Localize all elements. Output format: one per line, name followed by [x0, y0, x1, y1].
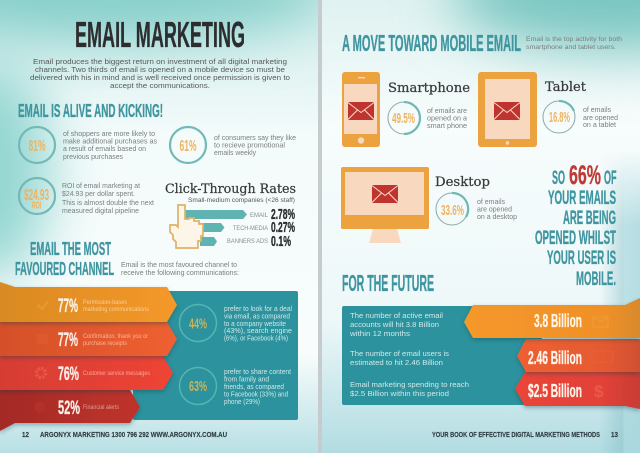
ribbon: 3.8 billion [464, 298, 640, 338]
text: smartphone [427, 106, 467, 130]
callout: so 66% of your emails [535, 160, 617, 290]
ribbon: 76% customer service: Customer service messages [83, 370, 151, 377]
stat: 81%: a result of emails based on [63, 144, 146, 153]
bar labels: EMAIL [250, 212, 269, 219]
ribbon: 2.46 billion: 2.46 Billion [528, 348, 582, 368]
heading: email the most favoured channel [15, 238, 114, 279]
label: desktop: Desktop [435, 175, 490, 190]
bar values [271, 207, 295, 250]
text: 44% description [224, 304, 292, 342]
text: 44% description: prefer to look for a deal [224, 304, 292, 313]
text: marketing spending: $2.5 Billion within this period [350, 389, 449, 398]
title: EMAIL MARKETING [75, 14, 245, 55]
heading: email the most favoured channel: EMAIL THE MOST [30, 238, 111, 259]
ribbon: 2.46 billion [517, 339, 640, 372]
text: marketing spending [350, 380, 469, 398]
ribbon: 76% customer service [0, 356, 173, 390]
ribbon: 52% financial alerts: Financial alerts [83, 404, 120, 411]
text: desktop: of emails [477, 197, 505, 206]
text: 63% description: friends, as compared [224, 382, 284, 391]
icon: dollar: $ [594, 382, 604, 401]
stat: 81% [19, 127, 157, 163]
icon: faint square [37, 334, 48, 344]
icon: faint hexagon [35, 401, 45, 413]
bar labels [227, 212, 269, 245]
text: OF [604, 167, 617, 189]
ribbon: 77% permission: Permission-bases [83, 299, 128, 306]
stat: ROI: $24.93 [24, 187, 49, 204]
label: tablet: Tablet [545, 80, 587, 95]
label: smartphone: Smartphone [388, 81, 470, 96]
ribbon: $2.5 billion: $2.5 Billion [528, 381, 582, 401]
background: left page [0, 0, 330, 453]
bar labels: TECH-MEDIA [233, 225, 269, 232]
bar values: 2.78% [271, 207, 295, 223]
text: active email accounts: accounts will hit 3.8 Billion [350, 320, 439, 329]
intro text: channels. Two thirds of email is opened on a mobile device so must be [35, 65, 285, 74]
ribbon: 3.8 billion: 3.8 Billion [534, 311, 582, 331]
ribbon: $2.5 billion [515, 372, 640, 409]
text: email users: estimated to hit 2.46 Billion [350, 358, 443, 367]
stat: ROI: ROI of email marketing at [62, 181, 140, 190]
chart title: Click-Through Rates [165, 182, 296, 197]
ribbon: 77% permission: 77% [58, 296, 78, 317]
heading: email is alive and kicking: EMAIL IS ALIVE AND KICKING! [18, 100, 163, 121]
ribbon: 77% permission: marketing communications [83, 306, 150, 313]
icon: faint envelopes [591, 351, 613, 362]
text: email users [350, 349, 449, 367]
text: tablet: on a tablet [583, 120, 616, 129]
mobile intro text: Email is the top activity for both [526, 36, 622, 43]
mobile intro text [526, 36, 622, 51]
text: smartphone: smart phone [427, 121, 467, 130]
heading: email the most favoured channel: FAVOURED CHANNEL [15, 258, 114, 279]
icon: desktop [341, 167, 429, 243]
mobile intro text: smartphone and tablet users. [526, 44, 616, 51]
click-through rates chart [165, 182, 296, 250]
footer: right page: 13 [611, 430, 618, 439]
text: 44% description: (43%), search engine [224, 326, 292, 335]
footer: left page: 12 [22, 430, 29, 439]
text: 63% description: to Facebook (33%) and [224, 390, 288, 398]
text: active email accounts: The number of active email [350, 311, 443, 320]
text: tablet: of emails [583, 105, 611, 114]
text: email users: The number of email users is [350, 349, 449, 358]
ribbon: 77% confirmation: Confirmation, thank you or [83, 333, 149, 340]
intro text: delivered with his in mind and is well received once permission is given to [30, 73, 290, 82]
stat: 33.6%: 33.6% [441, 202, 464, 219]
text: 63% description: prefer to share content [224, 367, 291, 376]
background: right page [322, 0, 640, 453]
icon: faint check [38, 301, 48, 309]
stat: ROI: $24.93 per dollar spent. [62, 189, 135, 198]
ribbon: 52% financial alerts [0, 390, 140, 431]
bar values: 0.1% [271, 234, 291, 250]
stat: ROI: ROI [32, 200, 42, 212]
text: FOR THE FUTURE [342, 270, 434, 296]
stat: 81%: previous purchases [63, 152, 123, 161]
chart subtitle: Small-medium companies (<26 staff) [188, 197, 295, 204]
icon: gear [36, 368, 46, 378]
ribbon: 52% financial alerts: 52% [58, 398, 80, 419]
stat: ROI: measured digital pipeline [62, 206, 139, 215]
stat: ROI [19, 178, 154, 215]
text: desktop: are opened [477, 204, 512, 214]
stat: 61% [170, 127, 296, 163]
stat: 61%: to recieve promotional [214, 140, 285, 150]
panel: teal stats [133, 291, 298, 420]
text: active email accounts [349, 311, 443, 338]
text: 44% description: to a company website [224, 319, 286, 328]
callout: so 66% of your emails: 66% [569, 160, 601, 190]
ribbon: 76% customer service: 76% [58, 364, 79, 385]
text: marketing spending: Email marketing spending to reach [350, 380, 469, 389]
intro text: Email produces the biggest return on investment of all digital marketing [33, 57, 287, 66]
text: smartphone: opened on a [427, 114, 467, 122]
icon: smartphone [342, 72, 380, 147]
stat: 63%: 63% [189, 378, 207, 395]
text: 63% description [224, 367, 291, 406]
stat: ROI: This is almost double the next [62, 198, 154, 207]
bar labels: BANNERS ADS [227, 238, 268, 245]
channel intro text [121, 260, 239, 277]
callout: so 66% of your emails: SO [552, 167, 565, 189]
stat: 81%: of shoppers are more likely to [63, 129, 155, 138]
text: 44% description: (6%), or Facebook (4%) [224, 334, 288, 342]
stat: 63% [180, 368, 216, 404]
channel intro text: receive the following communications: [121, 268, 239, 277]
bar values: 0.27% [271, 220, 295, 236]
stat: 61%: of consumers say they like [214, 133, 296, 142]
icon: tablet [478, 72, 537, 147]
stat: 16.8% [543, 101, 575, 133]
stat: 44% [180, 304, 216, 342]
text: tablet [583, 105, 618, 129]
ribbon: 77% permission [0, 282, 177, 322]
text: smartphone: of emails are [427, 106, 467, 115]
channel intro text: Email is the most favoured channel to [121, 260, 237, 269]
icon: faint envelope [593, 317, 608, 327]
stat: 61%: 61% [180, 138, 197, 155]
footer: left page: ARGONYX MARKETING 1300 796 292 WWW.ARGONYX.COM.AU [40, 430, 227, 439]
stat: 81%: 81% [28, 138, 46, 155]
ribbon: 77% confirmation: purchase receipts [83, 340, 128, 347]
text: 63% description: phone (29%) [224, 397, 260, 406]
ribbon: 77% confirmation: 77% [58, 330, 78, 351]
bars [184, 210, 247, 246]
stat: 16.8%: 16.8% [549, 109, 570, 126]
text: tablet: are opened [583, 113, 618, 122]
stat: 49.5%: 49.5% [392, 110, 415, 127]
text: 44% description: via email, as compared [224, 312, 290, 320]
stat: 81%: make additional purchases as [63, 136, 157, 146]
stat: 44%: 44% [189, 316, 207, 332]
stat: 33.6% [436, 193, 468, 225]
stat: 61%: emails weekly [214, 148, 256, 157]
page spine [318, 0, 322, 453]
icon: pointing hand [170, 205, 203, 248]
text: desktop: on a desktop [477, 212, 517, 221]
ribbon: 77% confirmation [0, 322, 177, 356]
stat: 49.5% [388, 102, 420, 134]
intro text: accept the communications. [110, 81, 210, 90]
text: desktop [477, 197, 517, 221]
intro text [30, 57, 290, 90]
panel: future forecasts [342, 306, 542, 405]
text: active email accounts: within 12 months [349, 329, 410, 338]
text: 63% description: from family and [224, 374, 269, 384]
